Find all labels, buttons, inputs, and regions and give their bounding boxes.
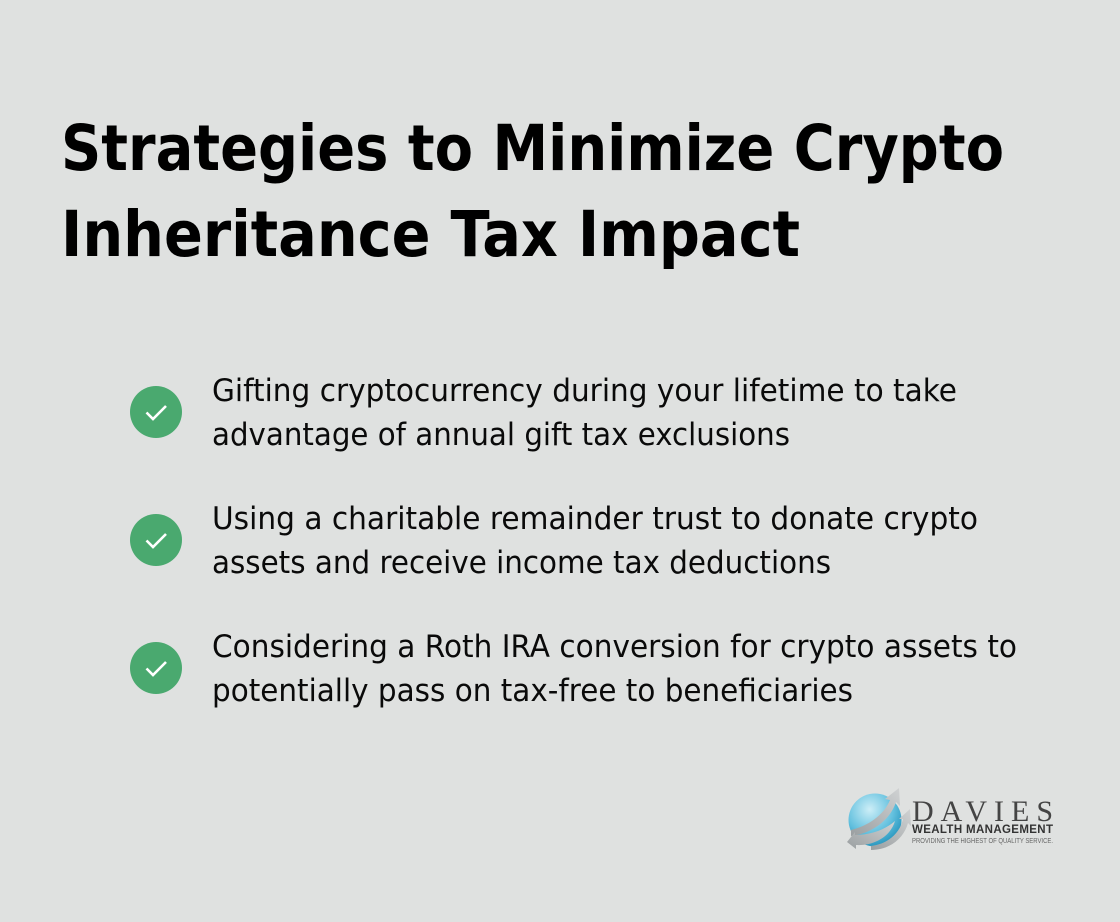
- icon: check 1: [130, 386, 182, 438]
- logo: Davies Wealth Management: [847, 788, 1053, 850]
- text: gifting strategy: Gifting cryptocurrency during your lifetime to take: [212, 373, 957, 409]
- text: charitable trust strategy: Using a charitable remainder trust to donate crypto: [212, 501, 978, 537]
- text: charitable trust strategy: [212, 501, 978, 581]
- icon: check 2: [130, 514, 182, 566]
- text: gifting strategy: [212, 373, 957, 453]
- title: Inheritance Tax Impact: [61, 198, 800, 271]
- text: gifting strategy: advantage of annual gift tax exclusions: [212, 417, 790, 453]
- logo subtitle: WEALTH MANAGEMENT: [912, 824, 1053, 836]
- text: Roth IRA strategy: potentially pass on tax-free to beneficiaries: [212, 673, 853, 709]
- title: Strategies to Minimize Crypto: [61, 112, 1004, 185]
- icon: globe with arrows: [847, 788, 911, 850]
- text: Roth IRA strategy: [212, 629, 1017, 709]
- logo wordmark: DAVIES: [912, 795, 1053, 828]
- text: charitable trust strategy: assets and receive income tax deductions: [212, 545, 831, 581]
- list item 1: [130, 373, 957, 453]
- icon: check 3: [130, 642, 182, 694]
- title: [61, 112, 1004, 271]
- list item 2: [130, 501, 978, 581]
- logo tagline: PROVIDING THE HIGHEST OF QUALITY SERVICE.: [912, 838, 1053, 845]
- text: Roth IRA strategy: Considering a Roth IRA conversion for crypto assets to: [212, 629, 1017, 665]
- list item 3: [130, 629, 1017, 709]
